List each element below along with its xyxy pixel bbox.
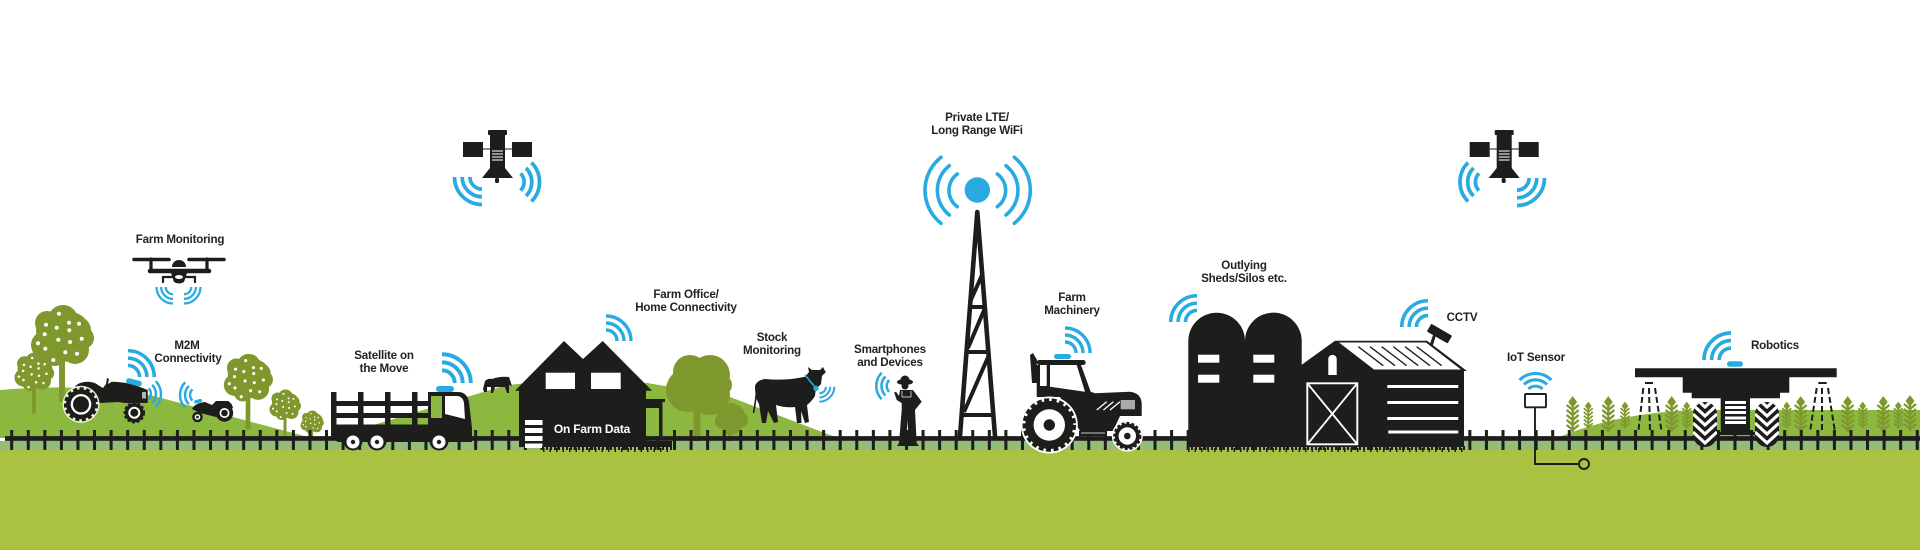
label: stock monitoring: Stock [757,331,788,344]
label: private LTE: Long Range WiFi [931,124,1023,137]
label: farm machinery [1044,291,1101,317]
label: IoT sensor: IoT Sensor [1507,351,1566,364]
tractor: small M2M [192,399,233,422]
tower signal [925,157,1030,223]
hill: right [1557,410,1920,438]
IoT sensor [1525,394,1589,469]
label: on farm data: On Farm Data [554,422,631,436]
icon: phone signal [868,373,895,399]
label: private LTE: Private LTE/ [945,111,1010,124]
icon: robot signal [1704,333,1731,360]
house [515,341,674,450]
wheat crops [1567,397,1916,432]
silo and barn grass [1187,448,1465,450]
icon: drone signal [156,287,200,304]
truck [331,386,472,450]
farmer [893,376,922,446]
label: CCTV: CCTV [1447,311,1478,324]
icon: IoT signal [1520,364,1551,396]
robot wheel left [1693,402,1717,447]
label: stock monitoring: Monitoring [743,344,801,357]
label: M2M connectivity: M2M [174,339,200,352]
label: farm machinery: Farm [1058,291,1086,304]
label: M2M connectivity: Connectivity [154,352,222,365]
label: private LTE [931,111,1023,137]
label: satellite on the move: Satellite on [354,349,414,362]
icon: CCTV camera [1427,324,1452,345]
label: outlying sheds [1201,259,1287,285]
robot sprayers [1638,383,1835,432]
icon: tractor signal [1065,328,1090,353]
hill: centre [330,383,838,438]
drone [134,259,224,284]
label: smartphones: and Devices [857,356,923,369]
label: farm office: Farm Office/ [653,288,720,301]
icon: cow signal [819,387,834,402]
hill: left [0,388,312,438]
cow: small grazing [483,377,512,393]
label: smartphones: Smartphones [854,343,926,356]
label: satellite on the move: the Move [360,362,409,375]
trees: olive trees by house [666,355,748,450]
trees: left orchard [14,305,324,446]
icon: house signal [606,316,631,341]
icon: silo signal [1171,296,1197,322]
label: satellite on the move [354,349,414,375]
satellite right [1449,130,1544,206]
label: outlying sheds: Sheds/Silos etc. [1201,272,1287,285]
ground [0,441,1920,550]
label: farm office: Home Connectivity [635,301,738,314]
tower [960,212,995,436]
icon: CCTV signal [1402,301,1428,327]
robot [1635,361,1837,447]
label: farm office [635,288,738,314]
icon: M2M signal large tractor [128,351,168,407]
icon: satellite left signal [454,163,551,204]
label: outlying sheds: Outlying [1221,259,1267,272]
label: M2M connectivity [154,339,222,365]
robot wheel right [1755,402,1779,447]
icon: truck signal [442,354,471,383]
label: farm machinery: Machinery [1044,304,1101,317]
icon: satellite right signal [1449,163,1544,206]
fence [5,438,1920,440]
label: robotics: Robotics [1751,339,1799,352]
cow collar [805,375,819,391]
label: smartphones [854,343,926,369]
icon: M2M signal small tractor [173,382,198,408]
tractor: farm machinery [1021,353,1143,454]
icon: server stack [525,420,542,448]
satellite left [454,130,551,204]
label: farm monitoring: Farm Monitoring [136,233,224,246]
silos [1188,313,1302,447]
label: stock monitoring [743,331,801,357]
barn door [1307,383,1357,444]
tractor: large M2M [62,378,148,423]
barn [1300,341,1467,447]
cow: stock [754,367,826,423]
